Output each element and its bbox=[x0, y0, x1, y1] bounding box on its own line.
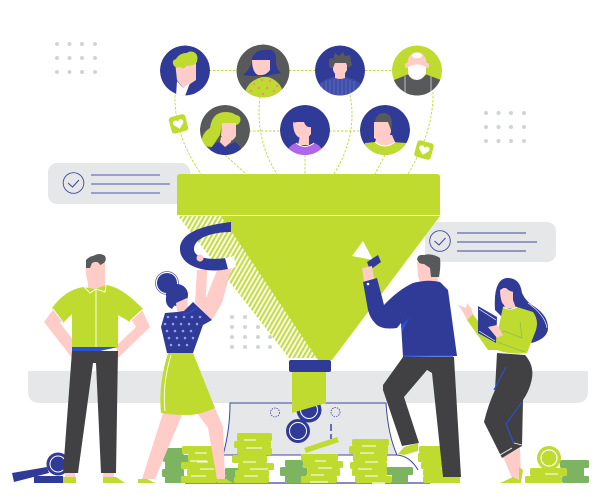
shoes bbox=[138, 479, 233, 483]
funnel spout bbox=[292, 372, 326, 413]
legs bbox=[142, 408, 225, 479]
dot grid: center bbox=[230, 315, 272, 349]
money stacks: dark green bbox=[162, 448, 589, 483]
sweater bbox=[363, 278, 457, 357]
avatar row 1: person 1 bbox=[160, 46, 210, 96]
tablet bbox=[478, 306, 497, 343]
coin on right stack bbox=[537, 446, 561, 470]
shoes bbox=[398, 443, 460, 483]
left coins and bar bbox=[12, 452, 70, 483]
head bbox=[417, 262, 438, 282]
gray floor band bbox=[28, 371, 588, 403]
shirt bbox=[52, 285, 143, 347]
gear circles bbox=[286, 398, 322, 443]
dashed small circles bbox=[270, 408, 340, 417]
avatar row 1: person 4 bbox=[392, 46, 442, 98]
arms bbox=[44, 310, 150, 358]
hair bbox=[86, 254, 106, 268]
dot grid: right bbox=[484, 111, 526, 143]
pants bbox=[484, 353, 532, 458]
funnel cone bbox=[221, 216, 440, 360]
hand on tablet bbox=[488, 325, 503, 338]
blouse bbox=[161, 302, 212, 353]
person: woman with tablet bbox=[458, 278, 548, 483]
long hair bbox=[495, 278, 548, 343]
bun and hair bbox=[156, 272, 188, 309]
dot grid: top left bbox=[55, 42, 97, 74]
magnet bbox=[180, 222, 236, 270]
skirt bbox=[160, 353, 215, 415]
funnel bbox=[177, 174, 440, 413]
person: man with megaphone bbox=[352, 241, 461, 483]
dashed connection lines bbox=[175, 70, 433, 174]
spring mark bbox=[330, 424, 332, 439]
avatar row 2: person 7 bbox=[360, 105, 410, 156]
avatar row 1: person 2 bbox=[236, 44, 290, 100]
pants bbox=[63, 351, 118, 473]
ankles bbox=[65, 473, 114, 478]
heart badge: right bbox=[414, 140, 434, 160]
pants bbox=[383, 357, 461, 477]
belt bbox=[72, 347, 118, 351]
heart badge: left bbox=[168, 113, 189, 134]
funnel rim bbox=[177, 174, 440, 215]
checklist bubble: right bbox=[425, 222, 556, 262]
face bbox=[500, 288, 516, 308]
face bbox=[176, 298, 188, 313]
checklist bubble: left bbox=[48, 163, 190, 204]
legs bbox=[503, 448, 521, 480]
avatar row 1: person 3 bbox=[315, 46, 365, 97]
hair bbox=[417, 254, 440, 277]
conveyor machine bbox=[185, 398, 430, 483]
money stacks: lime bbox=[181, 433, 567, 483]
funnel neck bbox=[289, 360, 331, 372]
funnel hatched shade bbox=[178, 216, 317, 358]
avatar row 2: person 6 bbox=[280, 105, 330, 156]
hair fringe bbox=[497, 278, 518, 292]
person: woman with magnet bbox=[138, 222, 236, 483]
hand bbox=[362, 266, 374, 282]
megaphone bbox=[352, 241, 381, 270]
avatar row 2: person 5 bbox=[200, 105, 250, 155]
pointing hand bbox=[458, 303, 473, 320]
head bbox=[86, 262, 106, 292]
shoes bbox=[63, 477, 125, 483]
arms bbox=[195, 266, 232, 320]
money stack highlights bbox=[190, 440, 558, 483]
shoes bbox=[500, 467, 523, 483]
falling green bar bbox=[304, 437, 339, 453]
sweater bbox=[467, 307, 537, 354]
person: man with hands on hips bbox=[44, 254, 150, 483]
